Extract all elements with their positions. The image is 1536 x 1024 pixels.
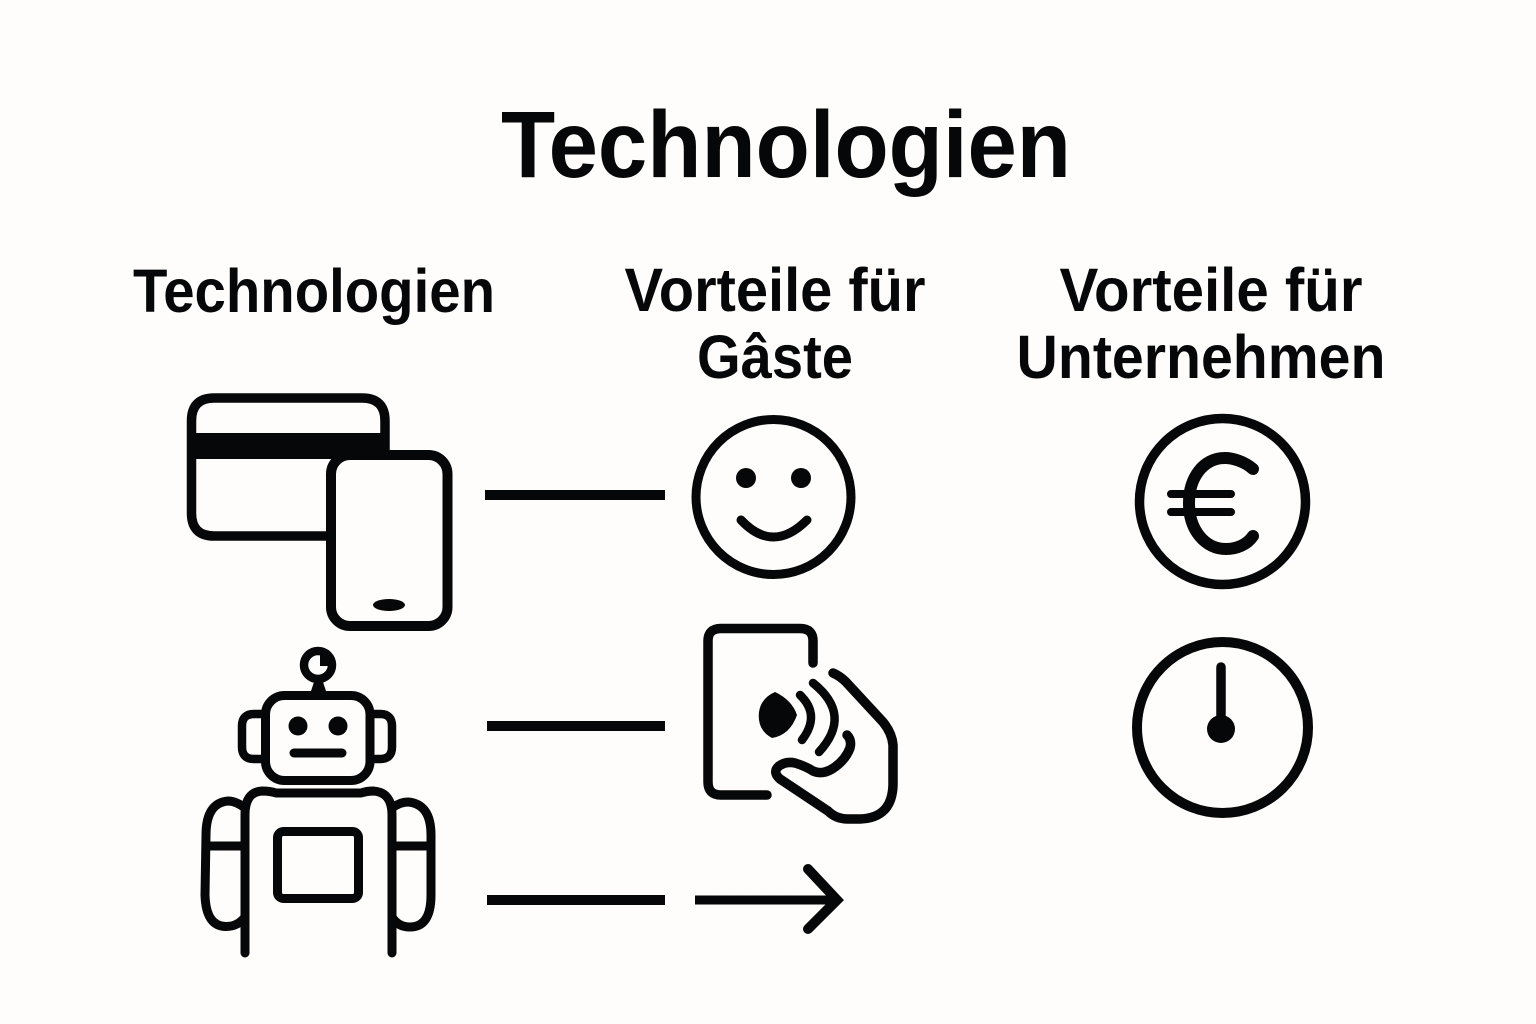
connector line, row 1: [485, 490, 665, 500]
icon: contactless payment with hand: [708, 628, 893, 819]
arrow: [695, 869, 837, 929]
column heading: Vorteile für Gäste: Gâste: [697, 323, 853, 391]
column heading: Technologien: Technologien: [133, 257, 495, 325]
connector line, row 2: [487, 721, 665, 731]
column heading: Vorteile für Gäste: [624, 256, 926, 391]
icon: robot: [205, 651, 431, 953]
column heading: Vorteile für Unternehmen: [1016, 256, 1386, 391]
title: Technologien: [501, 92, 1071, 198]
connector line, row 3: [487, 895, 665, 905]
icon: euro coin: [1140, 418, 1306, 584]
icon: card and smartphone: [192, 398, 448, 626]
icon: smiley face: [696, 420, 851, 574]
column heading: Vorteile für Unternehmen: Unternehmen: [1016, 323, 1386, 391]
column heading: Vorteile für Unternehmen: Vorteile für: [1060, 256, 1362, 324]
column heading: Vorteile für Gäste: Vorteile für: [624, 256, 926, 324]
icon: clock gauge: [1137, 642, 1308, 813]
